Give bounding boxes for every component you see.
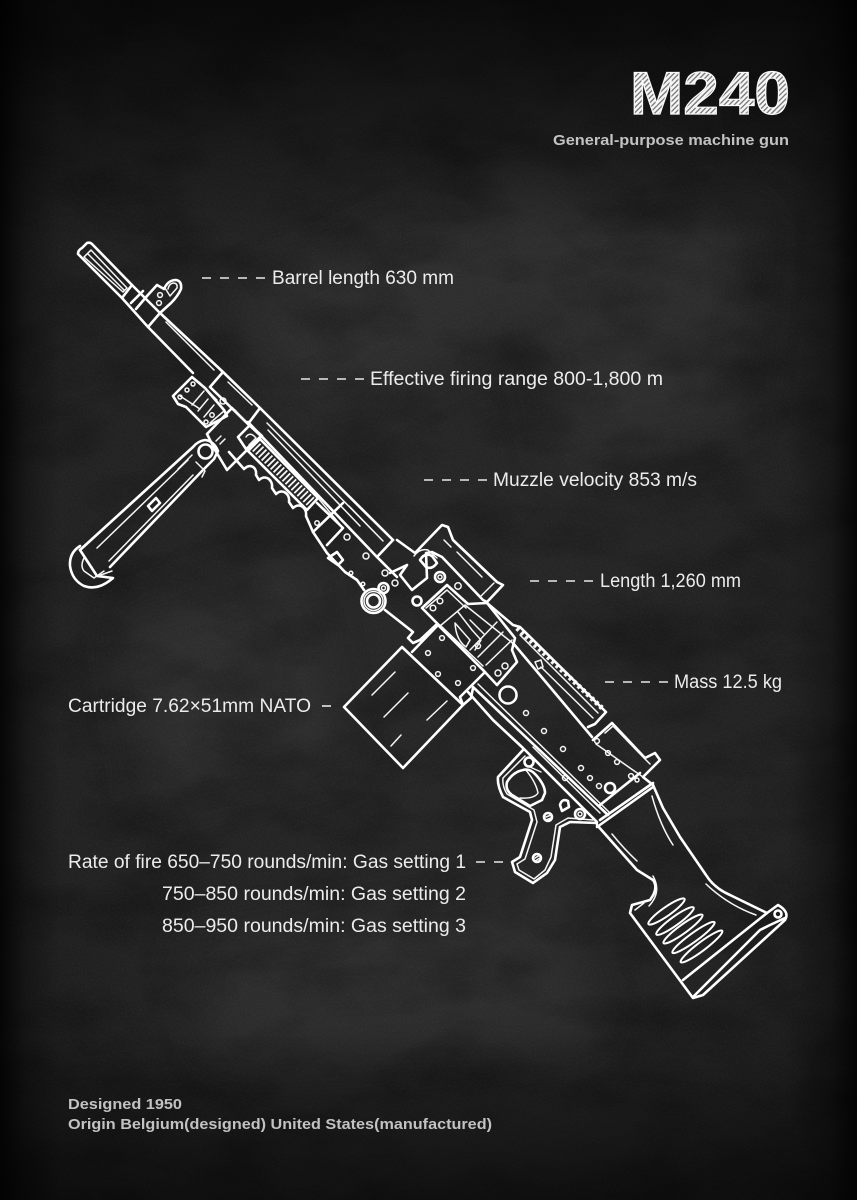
barrel <box>148 313 397 577</box>
callout: rate of fire: Rate of fire 650–750 rounds/min: Gas setting 1 <box>68 852 466 873</box>
footer: design and origin: Designed 1950 <box>68 1096 182 1113</box>
top rail <box>487 603 606 737</box>
footer: design and origin: Origin Belgium(designed) United States(manufactured) <box>68 1116 492 1133</box>
callout: mass: Mass 12.5 kg <box>674 672 782 693</box>
callout: effective firing range: Effective firing range 800-1,800 m <box>370 369 663 390</box>
buttstock <box>597 785 786 998</box>
callout: muzzle velocity: Muzzle velocity 853 m/s <box>493 470 697 491</box>
grip slots <box>646 895 725 966</box>
toothed rail <box>229 452 369 590</box>
callout: cartridge: Cartridge 7.62×51mm NATO <box>68 696 311 717</box>
receiver plate <box>412 625 485 705</box>
barrel mount <box>207 408 262 470</box>
feed cover <box>390 525 503 602</box>
callout: length: Length 1,260 mm <box>600 571 741 592</box>
callout: rate of fire: 750–850 rounds/min: Gas setting 2 <box>162 884 466 905</box>
receiver mechanism <box>412 585 517 685</box>
bipod <box>80 440 218 567</box>
flash hider <box>78 243 132 298</box>
footer: design and origin <box>68 1096 492 1133</box>
illustration: M240 machine gun line drawing <box>70 243 786 998</box>
title: M240 <box>630 60 790 127</box>
cooling vent <box>248 439 343 528</box>
gas regulator <box>173 377 227 427</box>
callout: barrel length: Barrel length 630 mm <box>272 268 454 289</box>
front sight and gas block <box>122 280 181 327</box>
trigger guard and pistol grip <box>498 750 597 883</box>
callout: rate of fire <box>68 852 504 937</box>
callout: rate of fire: 850–950 rounds/min: Gas setting 3 <box>162 916 466 937</box>
pivot <box>362 570 398 613</box>
receiver body <box>468 684 653 827</box>
ammunition box <box>344 647 463 768</box>
rear sight <box>593 723 660 785</box>
bipod foot <box>70 546 113 587</box>
subtitle: General-purpose machine gun <box>553 132 789 149</box>
hinge strut <box>385 610 436 643</box>
